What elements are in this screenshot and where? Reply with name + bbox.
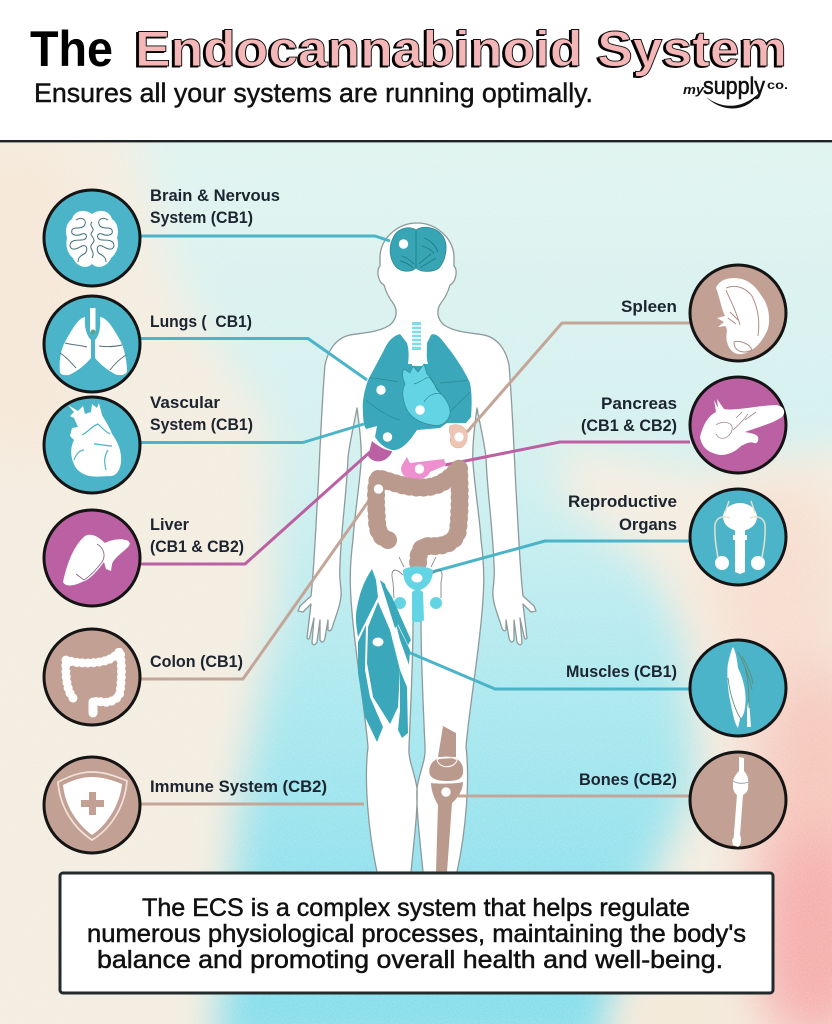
labels: right column: (CB1 & CB2) — [581, 416, 677, 435]
organ: liver — [368, 441, 392, 461]
icon: heart — [44, 397, 140, 493]
callout: summary box: The ECS is a complex system that helps regulate — [142, 894, 690, 922]
label: colon: Colon (CB1) — [150, 652, 243, 671]
organ: heart — [403, 364, 450, 426]
logo: mysupply co.: co. — [767, 78, 788, 92]
organ: lungs — [363, 334, 472, 450]
labels: left column — [150, 186, 327, 796]
label: bones: Bones (CB2) — [579, 770, 677, 789]
organ: brain — [390, 227, 446, 271]
labels: left column: System (CB1) — [150, 208, 253, 227]
icon: lungs — [44, 296, 140, 392]
title: Endocannabinoid System: Endocannabinoid System — [135, 21, 787, 77]
label: immune: Immune System (CB2) — [150, 777, 327, 796]
labels: right column — [566, 297, 677, 789]
receptor dots — [372, 239, 464, 797]
icon: spleen — [690, 265, 786, 361]
callout: summary box: numerous physiological processes, maintaining the body's — [87, 920, 746, 948]
icon: liver — [44, 510, 140, 606]
header — [0, 0, 832, 142]
callout: summary box: balance and promoting overall health and well-being. — [97, 946, 723, 974]
organ: thigh muscles — [356, 569, 411, 742]
icon: brain — [44, 190, 140, 286]
label: vascular: Vascular — [150, 393, 220, 412]
subtitle: Ensures all your systems are running optimally. — [34, 78, 593, 108]
organ: spleen — [449, 425, 467, 448]
labels: left column: (CB1 & CB2) — [150, 537, 244, 556]
organ: trachea — [412, 322, 424, 366]
icon: pancreas — [690, 377, 786, 473]
body silhouette — [298, 223, 536, 872]
organ: knee bones — [429, 726, 463, 872]
icon: bone — [690, 752, 786, 848]
logo: mysupply co.: my — [683, 82, 705, 97]
connector lines — [140, 236, 690, 804]
logo: mysupply co. — [683, 73, 788, 108]
label: muscles: Muscles (CB1) — [566, 662, 677, 681]
organ: reproductive — [392, 557, 442, 622]
labels: left column: System (CB1) — [150, 415, 253, 434]
labels: right column: Organs — [619, 515, 677, 534]
icon: shield — [44, 757, 140, 853]
label: reproductive: Reproductive — [568, 492, 677, 511]
organ: colon — [376, 468, 460, 568]
organ: pancreas — [401, 457, 446, 480]
label: spleen: Spleen — [621, 297, 677, 316]
icon: muscle — [690, 640, 786, 736]
label: lungs: Lungs ( CB1) — [150, 312, 252, 331]
callout: summary box — [60, 873, 773, 993]
logo: mysupply co.: supply — [703, 73, 765, 100]
title: The: The — [30, 21, 113, 77]
body organs — [356, 227, 472, 872]
label: pancreas: Pancreas — [601, 394, 677, 413]
icon: colon — [44, 629, 140, 725]
label: liver: Liver — [150, 515, 189, 534]
icon: reproductive organs — [690, 489, 786, 585]
label: brain: Brain & Nervous — [150, 186, 280, 205]
